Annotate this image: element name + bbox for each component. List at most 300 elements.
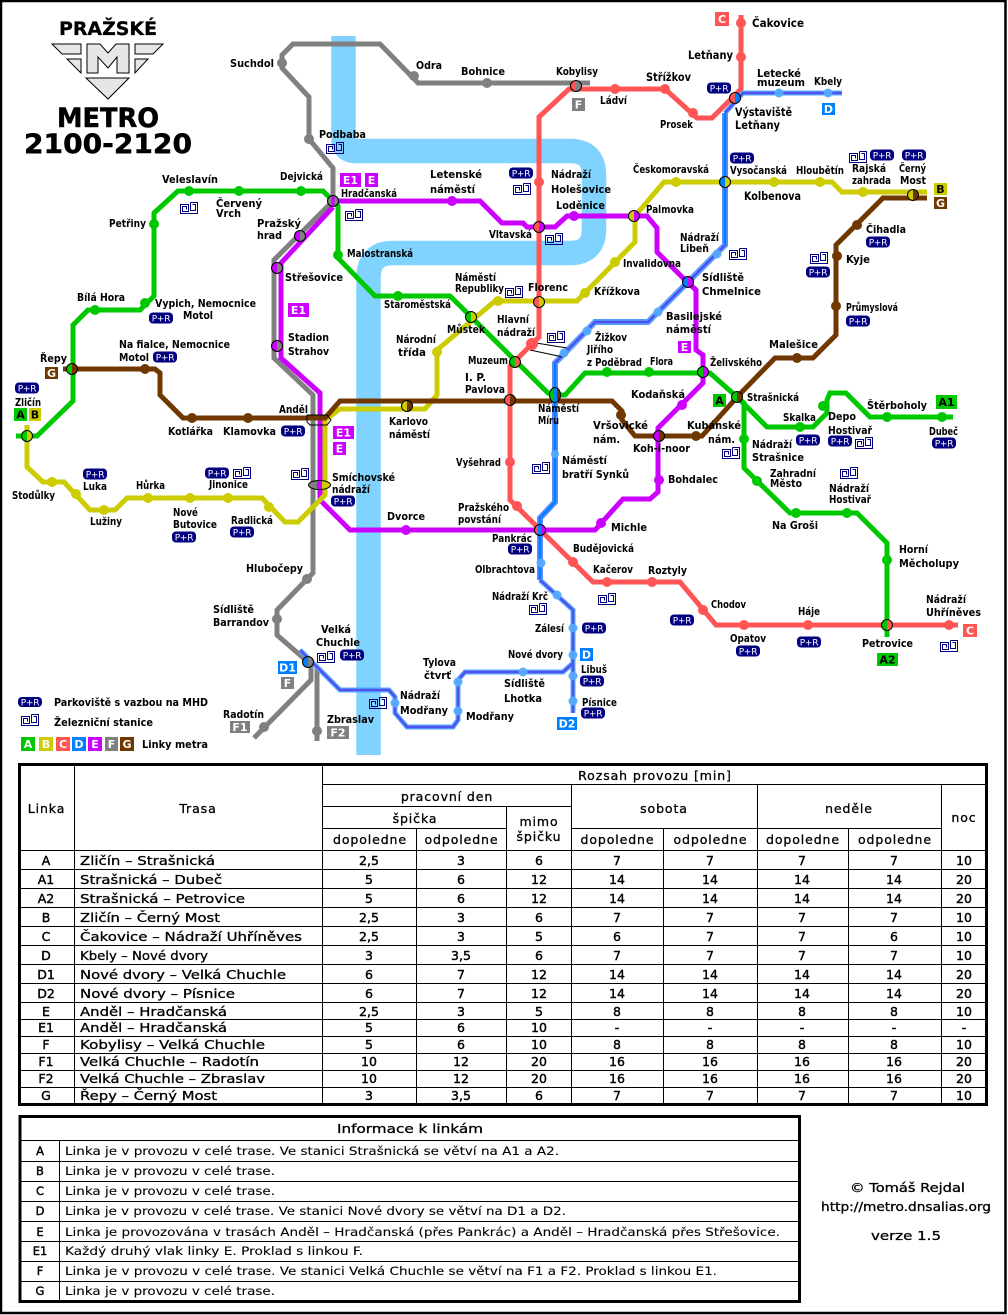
station: Čakovice: Čakovice: [752, 15, 804, 30]
station: Letecké muzeum: muzeum: [757, 76, 805, 89]
station: Nádraží Libeň: Libeň: [680, 242, 709, 255]
station: Náměstí bratří Synků: Náměstí: [562, 454, 608, 467]
row E: Anděl – Hradčanská: [80, 1004, 227, 1019]
table header: [28, 768, 977, 847]
row D1: 7: [457, 967, 465, 982]
station: Basilejské náměstí: náměstí: [666, 323, 712, 336]
badge D2: D2: [559, 718, 575, 730]
park and ride badges: P+R: [849, 317, 867, 327]
schedule table: [20, 764, 986, 1104]
station: Zahradní Město: Zahradní: [770, 467, 817, 480]
row D2: Nové dvory – Písnice: [80, 986, 235, 1001]
row B: [42, 910, 972, 925]
station: Bílá Hora: Bílá Hora: [77, 291, 125, 304]
park and ride badges: P+R: [831, 437, 849, 447]
green stations: [90, 186, 947, 565]
line badges: [14, 12, 977, 740]
station: Národní třída: třída: [398, 346, 426, 359]
row C: [42, 929, 972, 944]
row E1: [38, 1020, 966, 1035]
station: Výstaviště Letňany: Letňany: [735, 118, 780, 132]
line F gray: [254, 44, 590, 741]
station: Horní Měcholupy: Horní: [899, 543, 929, 556]
station: Kobylisy: Kobylisy: [556, 65, 598, 78]
row E1: -: [962, 1020, 966, 1035]
row G: 7: [706, 1088, 714, 1103]
station: Karlovo náměstí: [389, 415, 431, 441]
station: Kyje: Kyje: [846, 253, 870, 266]
row E1: E1: [38, 1020, 54, 1035]
station: Řepy: Řepy: [40, 352, 67, 365]
station: Kubánské nám.: nám.: [708, 433, 735, 446]
station: Nádraží Holešovice: Nádraží: [551, 168, 592, 181]
station: Suchdol: Suchdol: [230, 57, 274, 70]
row B: 6: [535, 910, 543, 925]
row E1: Anděl – Hradčanská: [80, 1020, 227, 1035]
station: Letenské náměstí: náměstí: [430, 183, 476, 196]
station: Stodůlky: Stodůlky: [12, 489, 55, 502]
legend: railway station: [22, 714, 153, 729]
row F2: Velká Chuchle – Zbraslav: [80, 1071, 266, 1086]
brown stations: [140, 220, 862, 441]
station: Smíchovské nádraží: Smíchovské: [332, 471, 395, 484]
row A: 7: [798, 853, 806, 868]
station: Muzeum: Muzeum: [468, 354, 508, 367]
row D1: Nové dvory – Velká Chuchle: [80, 967, 286, 982]
row E: 8: [890, 1004, 898, 1019]
station: Nádraží Modřany: [400, 689, 448, 717]
badge F1: F1: [232, 721, 248, 734]
table header: Trasa: [178, 801, 217, 816]
station: Nádraží Holešovice: Holešovice: [551, 183, 611, 196]
row E: 8: [706, 1004, 714, 1019]
table header: odpoledne: [674, 832, 747, 847]
line D branches outer: [300, 93, 842, 727]
badge C Uhříněves: [963, 624, 977, 638]
badge F Kobylisy: F: [575, 98, 582, 112]
legend: railway station: Železniční stanice: [54, 716, 153, 729]
legend: metro lines: B: [42, 738, 50, 751]
station: Náměstí Republiky: [455, 271, 504, 295]
station: Nádraží Hostivař: Hostivař: [829, 493, 871, 506]
author credits: [821, 1181, 991, 1243]
station: Budějovická: Budějovická: [573, 542, 634, 555]
station: Národní třída: Národní: [396, 333, 437, 346]
title: years: 2100-2120: [24, 129, 192, 160]
station: Roztyly: Roztyly: [648, 564, 687, 577]
line information table: [20, 1116, 800, 1302]
station: Nové Butovice: [173, 506, 217, 531]
station: Tylova čtvrť: [423, 656, 456, 682]
badge E Basilejské: E: [681, 341, 688, 354]
info row G: G: [36, 1284, 44, 1298]
badge D Nové dvory: D: [582, 648, 591, 662]
badge E Hradčanská: [365, 173, 378, 187]
station: Sídliště Chmelnice: Sídliště: [702, 271, 744, 284]
badge G Černý Most: G: [936, 197, 945, 210]
station: Libuš: Libuš: [581, 663, 607, 676]
badge E Anděl: E: [336, 442, 343, 456]
badge A1: A1: [938, 396, 955, 409]
station: Tylova čtvrť: čtvrť: [424, 669, 452, 682]
row F: Kobylisy – Velká Chuchle: [80, 1037, 265, 1052]
table header: dopoledne: [333, 832, 407, 847]
station: Kbely: Kbely: [814, 75, 842, 88]
row F: F: [42, 1037, 50, 1052]
row C: 3: [457, 929, 465, 944]
station: Letecké muzeum: [757, 67, 805, 89]
station: Letecké muzeum: Letecké: [757, 67, 801, 80]
author name: © Tomáš Rejdal: [850, 1181, 965, 1195]
row F1: 12: [453, 1054, 469, 1069]
station: Strašnická: Strašnická: [747, 391, 799, 404]
row B: 7: [613, 910, 621, 925]
line D branches core: [300, 93, 842, 727]
station: Dvorce: Dvorce: [387, 510, 425, 523]
row A: Zličín – Strašnická: [80, 853, 215, 868]
website: http://metro.dnsalias.org: [821, 1200, 991, 1214]
info row E: E: [36, 1225, 44, 1239]
station: Opatov: Opatov: [730, 632, 767, 645]
row D2: 14: [609, 986, 625, 1001]
station: Bohnice: Bohnice: [461, 65, 505, 78]
row A2: 14: [886, 891, 902, 906]
badge E1 Střešovice: E1: [291, 304, 306, 317]
station: Hloubětín: Hloubětín: [796, 164, 844, 177]
row F: 5: [365, 1037, 373, 1052]
badge A2: A2: [879, 654, 896, 666]
station: Náměstí bratří Synků: [562, 454, 629, 481]
row D1: D1: [37, 967, 55, 982]
station: Nádraží Uhříněves: [926, 593, 981, 619]
station: Radotín: Radotín: [223, 708, 264, 721]
station: Nádraží Uhříněves: Nádraží: [926, 593, 967, 606]
station: Michle: Michle: [611, 521, 647, 534]
station: Dubeč: Dubeč: [929, 425, 958, 438]
row A2: 14: [702, 891, 718, 906]
station: Rajská zahrada: [852, 162, 891, 187]
station: Basilejské náměstí: [666, 310, 722, 336]
station: Nádraží Uhříněves: Uhříněves: [926, 606, 981, 619]
badge G Černý Most: [934, 197, 947, 210]
row D2: 14: [794, 986, 810, 1001]
row A1: 14: [702, 872, 718, 887]
row A1: 14: [794, 872, 810, 887]
park and ride badges: P+R: [935, 439, 953, 449]
station: Výstaviště Letňany: Výstaviště: [735, 105, 792, 119]
park and ride badges: P+R: [809, 268, 827, 278]
station: I. P. Pavlova: Pavlova: [465, 383, 505, 396]
station: Náměstí Republiky: Náměstí: [455, 271, 497, 284]
badge D Nové dvory: [580, 648, 593, 662]
legend: metro lines: [21, 737, 208, 751]
station: Pražského povstání: Pražského: [458, 501, 509, 514]
row E: 8: [613, 1004, 621, 1019]
park and ride badges: P+R: [584, 709, 602, 719]
row G: 6: [535, 1088, 543, 1103]
station: Ládví: Ládví: [600, 94, 628, 107]
row F2: 12: [453, 1071, 469, 1086]
station: Vypich, Nemocnice Motol: [155, 297, 256, 322]
station: Pražský hrad: hrad: [257, 229, 282, 242]
row A: 2,5: [359, 853, 379, 868]
row G: Řepy – Černý Most: [80, 1088, 217, 1103]
station: Černý Most: Most: [900, 174, 926, 187]
stations: [22, 18, 954, 736]
row E1: -: [615, 1020, 619, 1035]
station: Kodaňská: Kodaňská: [631, 388, 685, 401]
table header: dopoledne: [581, 832, 654, 847]
line C red: [510, 15, 958, 625]
station: Červený Vrch: Červený: [216, 197, 262, 210]
row C: 2,5: [359, 929, 379, 944]
station: Sídliště Barrandov: Sídliště: [213, 603, 254, 616]
station: Letenské náměstí: Letenské: [430, 168, 482, 181]
station: Horní Měcholupy: Měcholupy: [899, 557, 959, 570]
blue stations: [390, 88, 832, 716]
station: Náměstí Míru: [538, 402, 580, 427]
row D1: 14: [702, 967, 718, 982]
station: Luka: Luka: [83, 480, 107, 493]
station: Písnice: Písnice: [582, 696, 617, 709]
table header: pracovní den: [401, 789, 493, 804]
row E: 3: [457, 1004, 465, 1019]
river Vltava: [344, 36, 594, 755]
station: Pražský hrad: [257, 217, 301, 242]
station: Nádraží Hostivař: Nádraží: [829, 482, 870, 495]
row E: 8: [798, 1004, 806, 1019]
row A: 7: [613, 853, 621, 868]
row F1: Velká Chuchle – Radotín: [80, 1054, 259, 1069]
info row A: A: [36, 1144, 44, 1158]
station: Hradčanská: Hradčanská: [341, 187, 397, 200]
park and ride badges: P+R: [799, 436, 817, 446]
row F1: 16: [794, 1054, 810, 1069]
line D outer: [540, 113, 725, 580]
station: Dejvická: Dejvická: [280, 170, 323, 183]
station labels: [12, 15, 981, 726]
row C: 7: [706, 929, 714, 944]
row F1: 20: [956, 1054, 972, 1069]
station: Invalidovna: Invalidovna: [623, 257, 681, 270]
row C: 6: [613, 929, 621, 944]
station: Depo Hostivař: Depo: [828, 410, 856, 423]
station: Sídliště Barrandov: [213, 603, 270, 629]
row C: 6: [890, 929, 898, 944]
station: Jiřího z Poděbrad: [586, 343, 642, 369]
row A1: [38, 872, 972, 887]
row C: C: [42, 929, 51, 944]
row G: 10: [956, 1088, 972, 1103]
row D: D: [41, 948, 51, 963]
row A2: [38, 891, 972, 906]
station: Staroměstská: Staroměstská: [384, 298, 451, 311]
station: Nádraží Krč: Nádraží Krč: [492, 590, 548, 603]
station: Náměstí bratří Synků: bratří Synků: [562, 468, 629, 481]
station: Hlavní nádraží: nádraží: [497, 326, 536, 339]
station: Nádraží Libeň: Nádraží: [680, 231, 720, 244]
badge F Chuchle: F: [284, 677, 291, 690]
row F1: 16: [609, 1054, 625, 1069]
row D1: 12: [531, 967, 547, 982]
row F2: 16: [794, 1071, 810, 1086]
station: Sídliště Chmelnice: Chmelnice: [702, 285, 761, 298]
row G: 7: [798, 1088, 806, 1103]
station: Na fialce, Nemocnice Motol: Na fialce, Nemocnice: [119, 338, 230, 351]
badge C Čakovice: [715, 12, 729, 26]
row F1: F1: [38, 1054, 54, 1069]
red stations: [505, 18, 954, 630]
row A1: 6: [457, 872, 465, 887]
badge F Kobylisy: [572, 98, 585, 112]
row F: 8: [798, 1037, 806, 1052]
row C: 5: [535, 929, 543, 944]
badge A/B Zličín: A: [16, 408, 25, 422]
legend: park and ride: Parkoviště s vazbou na MHD: [54, 696, 208, 709]
row A: 7: [706, 853, 714, 868]
table header: noc: [951, 810, 977, 825]
row F: 8: [706, 1037, 714, 1052]
park and ride badges: [15, 82, 956, 719]
legend: park and ride: P+R: [21, 698, 39, 708]
station: Nádraží Modřany: Nádraží: [400, 689, 441, 702]
row F: 10: [531, 1037, 547, 1052]
station: Nové dvory: Nové dvory: [508, 648, 563, 661]
park and ride badges: P+R: [585, 624, 603, 634]
station: Rajská zahrada: zahrada: [852, 174, 891, 187]
row D: 10: [956, 948, 972, 963]
station: Průmyslová: Průmyslová: [846, 301, 898, 314]
park and ride badges: P+R: [733, 154, 751, 164]
badge A/B Zličín: [14, 408, 41, 422]
row C: 7: [798, 929, 806, 944]
park and ride badges: P+R: [873, 151, 891, 161]
station: Zahradní Město: [770, 467, 817, 490]
station: Hůrka: Hůrka: [136, 479, 165, 492]
table header: špička: [393, 811, 437, 826]
station: Florenc: Florenc: [528, 281, 568, 294]
station: Želivského: Želivského: [710, 356, 762, 369]
row A1: 14: [609, 872, 625, 887]
row E1: 6: [457, 1020, 465, 1035]
line G brown: [63, 198, 927, 436]
row F2: 20: [956, 1071, 972, 1086]
station: Zličín: Zličín: [15, 396, 41, 409]
station: Tylova čtvrť: Tylova: [423, 656, 456, 669]
title: Metro: METRO: [57, 103, 159, 134]
station: Zahradní Město: Město: [770, 477, 802, 490]
row G: 7: [890, 1088, 898, 1103]
row F: 10: [956, 1037, 972, 1052]
row B: 2,5: [359, 910, 379, 925]
station: Vršovické nám.: [593, 419, 648, 446]
station: Na Groši: Na Groši: [772, 519, 818, 532]
row D1: 6: [365, 967, 373, 982]
station: Černý Most: [899, 162, 926, 187]
station: Sídliště Lhotka: [504, 677, 545, 705]
row B: 7: [706, 910, 714, 925]
station: Vysočanská: Vysočanská: [730, 164, 787, 177]
station: Stadion Strahov: Stadion: [288, 331, 329, 344]
row F: 8: [613, 1037, 621, 1052]
row D1: [37, 967, 972, 982]
station: Klamovka: Klamovka: [223, 425, 276, 438]
park and ride badges: P+R: [511, 545, 529, 555]
info row C: C: [36, 1184, 44, 1198]
badge E1 Anděl: E1: [336, 426, 351, 440]
station: Křížkova: Křížkova: [594, 285, 640, 298]
row D: 7: [706, 948, 714, 963]
row A2: 14: [609, 891, 625, 906]
info row D: D: [36, 1204, 45, 1218]
row F2: F2: [38, 1071, 54, 1086]
row A1: 14: [886, 872, 902, 887]
station: Letenské náměstí: [430, 168, 482, 196]
table header: odpoledne: [425, 832, 498, 847]
row F2: 16: [886, 1071, 902, 1086]
info row C: Linka je v provozu v celé trase.: [65, 1184, 275, 1198]
station: Červený Vrch: Vrch: [216, 207, 241, 220]
station: Nádraží Hostivař: [829, 482, 871, 506]
row E1: -: [708, 1020, 712, 1035]
railway station icons: [180, 142, 958, 708]
badge F2: [327, 726, 349, 740]
row G: G: [41, 1088, 51, 1103]
station: Vyšehrad: Vyšehrad: [456, 456, 501, 469]
station: Nádraží Strašnice: Nádraží: [752, 438, 793, 451]
station: Zálesí: Zálesí: [535, 622, 565, 635]
station: Nádraží Modřany: Modřany: [400, 704, 448, 717]
station: Kačerov: Kačerov: [593, 563, 634, 576]
yellow stations: [47, 177, 868, 515]
metro lines: [16, 15, 958, 741]
row D: [41, 948, 972, 963]
station: Čihadla: Čihadla: [866, 223, 906, 236]
row B: 7: [798, 910, 806, 925]
row F: 8: [890, 1037, 898, 1052]
table header: dopoledne: [766, 832, 840, 847]
station: Národní třída: [396, 333, 437, 359]
row D1: 14: [609, 967, 625, 982]
station: Kubánské nám.: Kubánské: [687, 419, 741, 432]
row E1: 10: [531, 1020, 547, 1035]
station: Velká Chuchle: [316, 623, 360, 649]
row E: E: [42, 1004, 50, 1019]
station: Žižkov: Žižkov: [595, 331, 628, 344]
info row F: F: [37, 1264, 43, 1278]
row D2: D2: [37, 986, 55, 1001]
row E1: 5: [365, 1020, 373, 1035]
station: Skalka: Skalka: [783, 411, 816, 424]
version: verze 1.5: [871, 1229, 941, 1243]
station: Smíchovské nádraží: [332, 471, 395, 496]
row A1: 20: [956, 872, 972, 887]
station: Sídliště Chmelnice: [702, 271, 761, 298]
station: Střešovice: Střešovice: [285, 271, 343, 284]
station: Stadion Strahov: Strahov: [288, 345, 330, 358]
row A2: 5: [365, 891, 373, 906]
table header: mimo: [519, 814, 559, 829]
station: Háje: Háje: [798, 605, 820, 618]
station: Hlubočepy: Hlubočepy: [246, 562, 303, 575]
park and ride badges: P+R: [869, 238, 887, 248]
row F2: 20: [531, 1071, 547, 1086]
station: Karlovo náměstí: náměstí: [389, 428, 431, 441]
station: Lužiny: Lužiny: [90, 515, 122, 528]
station: Chodov: Chodov: [711, 598, 747, 611]
park and ride badges: P+R: [284, 427, 302, 437]
legend: metro lines: F: [108, 738, 115, 751]
